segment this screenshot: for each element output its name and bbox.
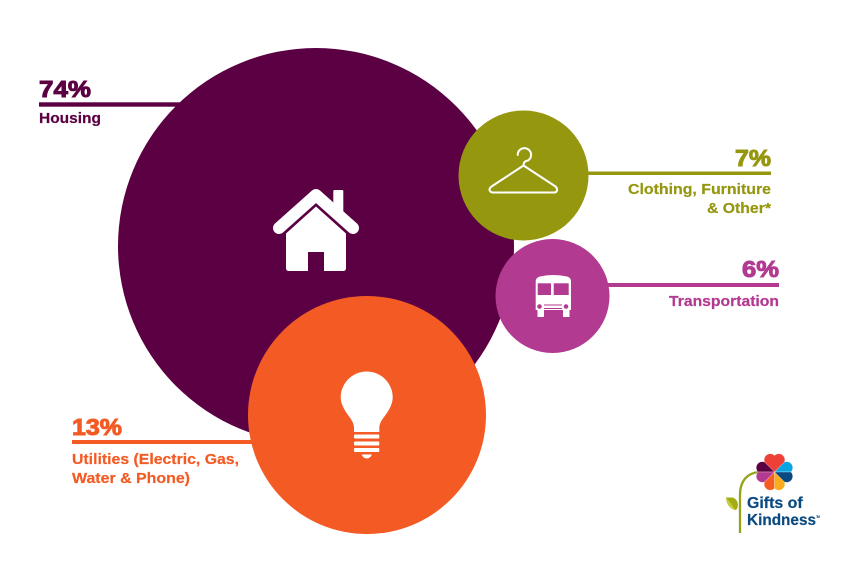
logo stem [740,472,759,533]
housing leader line [39,102,184,107]
housing label: Housing [39,111,101,127]
transportation circle [496,239,610,353]
clothing label line 2: & Other* [707,201,771,217]
housing percentage: 74% [39,76,91,102]
housing callout [39,76,184,127]
logo wordmark: Gifts of [747,495,804,512]
clothing leader line [580,172,771,175]
logo: Gifts of Kindness [726,454,821,533]
utilities callout [72,414,257,487]
logo leaf [726,498,738,510]
utilities circle [248,296,486,534]
logo wordmark: Kindness [747,512,816,529]
logo wordmark: TM [816,514,821,519]
transportation percentage: 6% [742,256,779,282]
utilities label line 2: Water & Phone) [72,471,190,487]
logo wordmark [747,495,821,529]
icon: house [279,190,353,271]
clothing circle [458,110,588,240]
logo flower [756,454,793,490]
icon: bus [536,275,571,317]
icon: hanger [490,148,557,192]
utilities percentage: 13% [72,414,122,440]
utilities label line 1: Utilities (Electric, Gas, [72,452,239,468]
utilities leader line [72,440,257,444]
icon: light bulb [341,372,393,458]
transportation leader line [600,283,779,287]
clothing callout [580,145,771,217]
housing circle [118,48,514,444]
transportation label: Transportation [669,294,779,310]
transportation callout [600,256,779,310]
clothing label line 1: Clothing, Furniture [628,182,771,198]
clothing percentage: 7% [735,145,771,171]
